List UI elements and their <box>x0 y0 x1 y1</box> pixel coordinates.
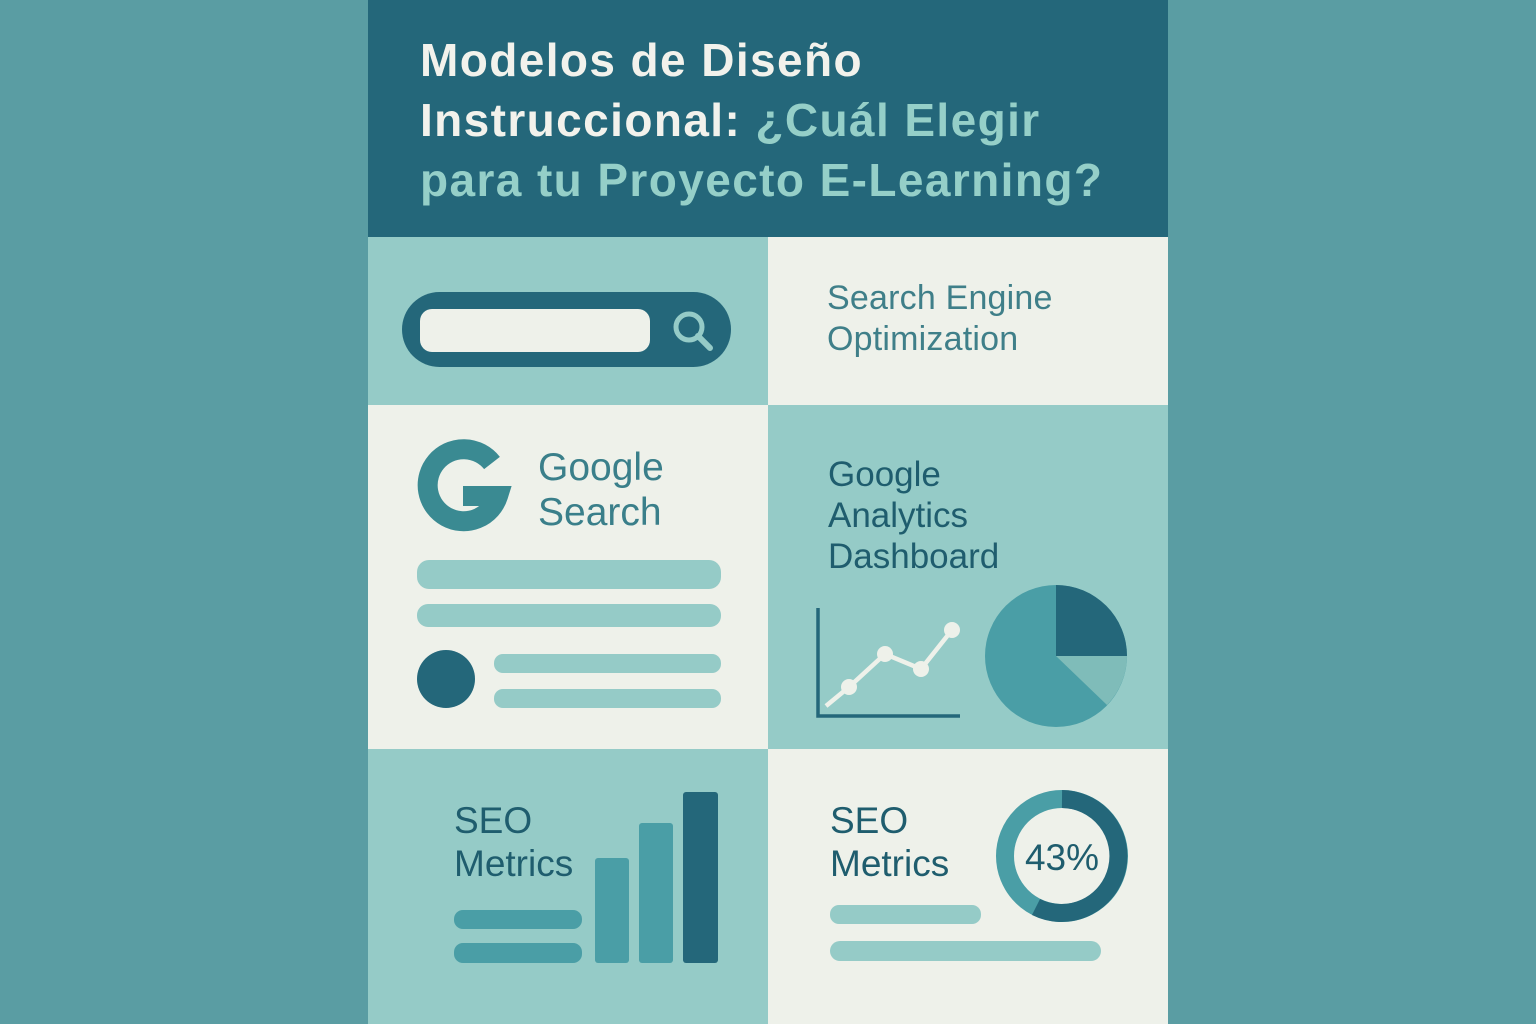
text lines <box>830 905 1101 961</box>
panel: analytics dashboard <box>768 405 1168 749</box>
line chart <box>818 608 960 716</box>
panel: search bar <box>368 237 768 405</box>
text: analytics heading: Google <box>828 455 941 494</box>
title: para tu Proyecto E-Learning? <box>420 154 1103 206</box>
text: SEO label: Optimization <box>827 320 1018 358</box>
header panel <box>368 0 1168 237</box>
donut chart <box>1005 799 1119 913</box>
text: seo metrics: Metrics <box>454 843 573 884</box>
text: analytics heading: Dashboard <box>828 537 999 576</box>
text: google search: Search <box>538 491 662 534</box>
text: SEO label: Search Engine <box>827 279 1053 317</box>
text: seo metrics: Metrics <box>830 843 949 884</box>
panel: search engine optimization <box>768 237 1168 405</box>
panel: google search <box>368 405 768 749</box>
title: Modelos de Diseño <box>420 34 863 86</box>
text: seo metrics: SEO <box>454 800 532 841</box>
icon: search bar <box>402 292 731 367</box>
text: seo metrics: SEO <box>830 800 908 841</box>
text: google search: Google <box>538 446 664 489</box>
donut chart: 43% <box>1025 837 1099 878</box>
result lines <box>417 560 721 708</box>
panel: SEO metrics bars <box>368 749 768 1024</box>
bar chart <box>454 792 718 963</box>
title: Instruccional: ¿Cuál Elegir <box>420 94 1041 146</box>
icon: google G <box>428 449 498 521</box>
panel: SEO metrics donut <box>768 749 1168 1024</box>
pie chart <box>985 585 1127 727</box>
text: analytics heading: Analytics <box>828 496 968 535</box>
